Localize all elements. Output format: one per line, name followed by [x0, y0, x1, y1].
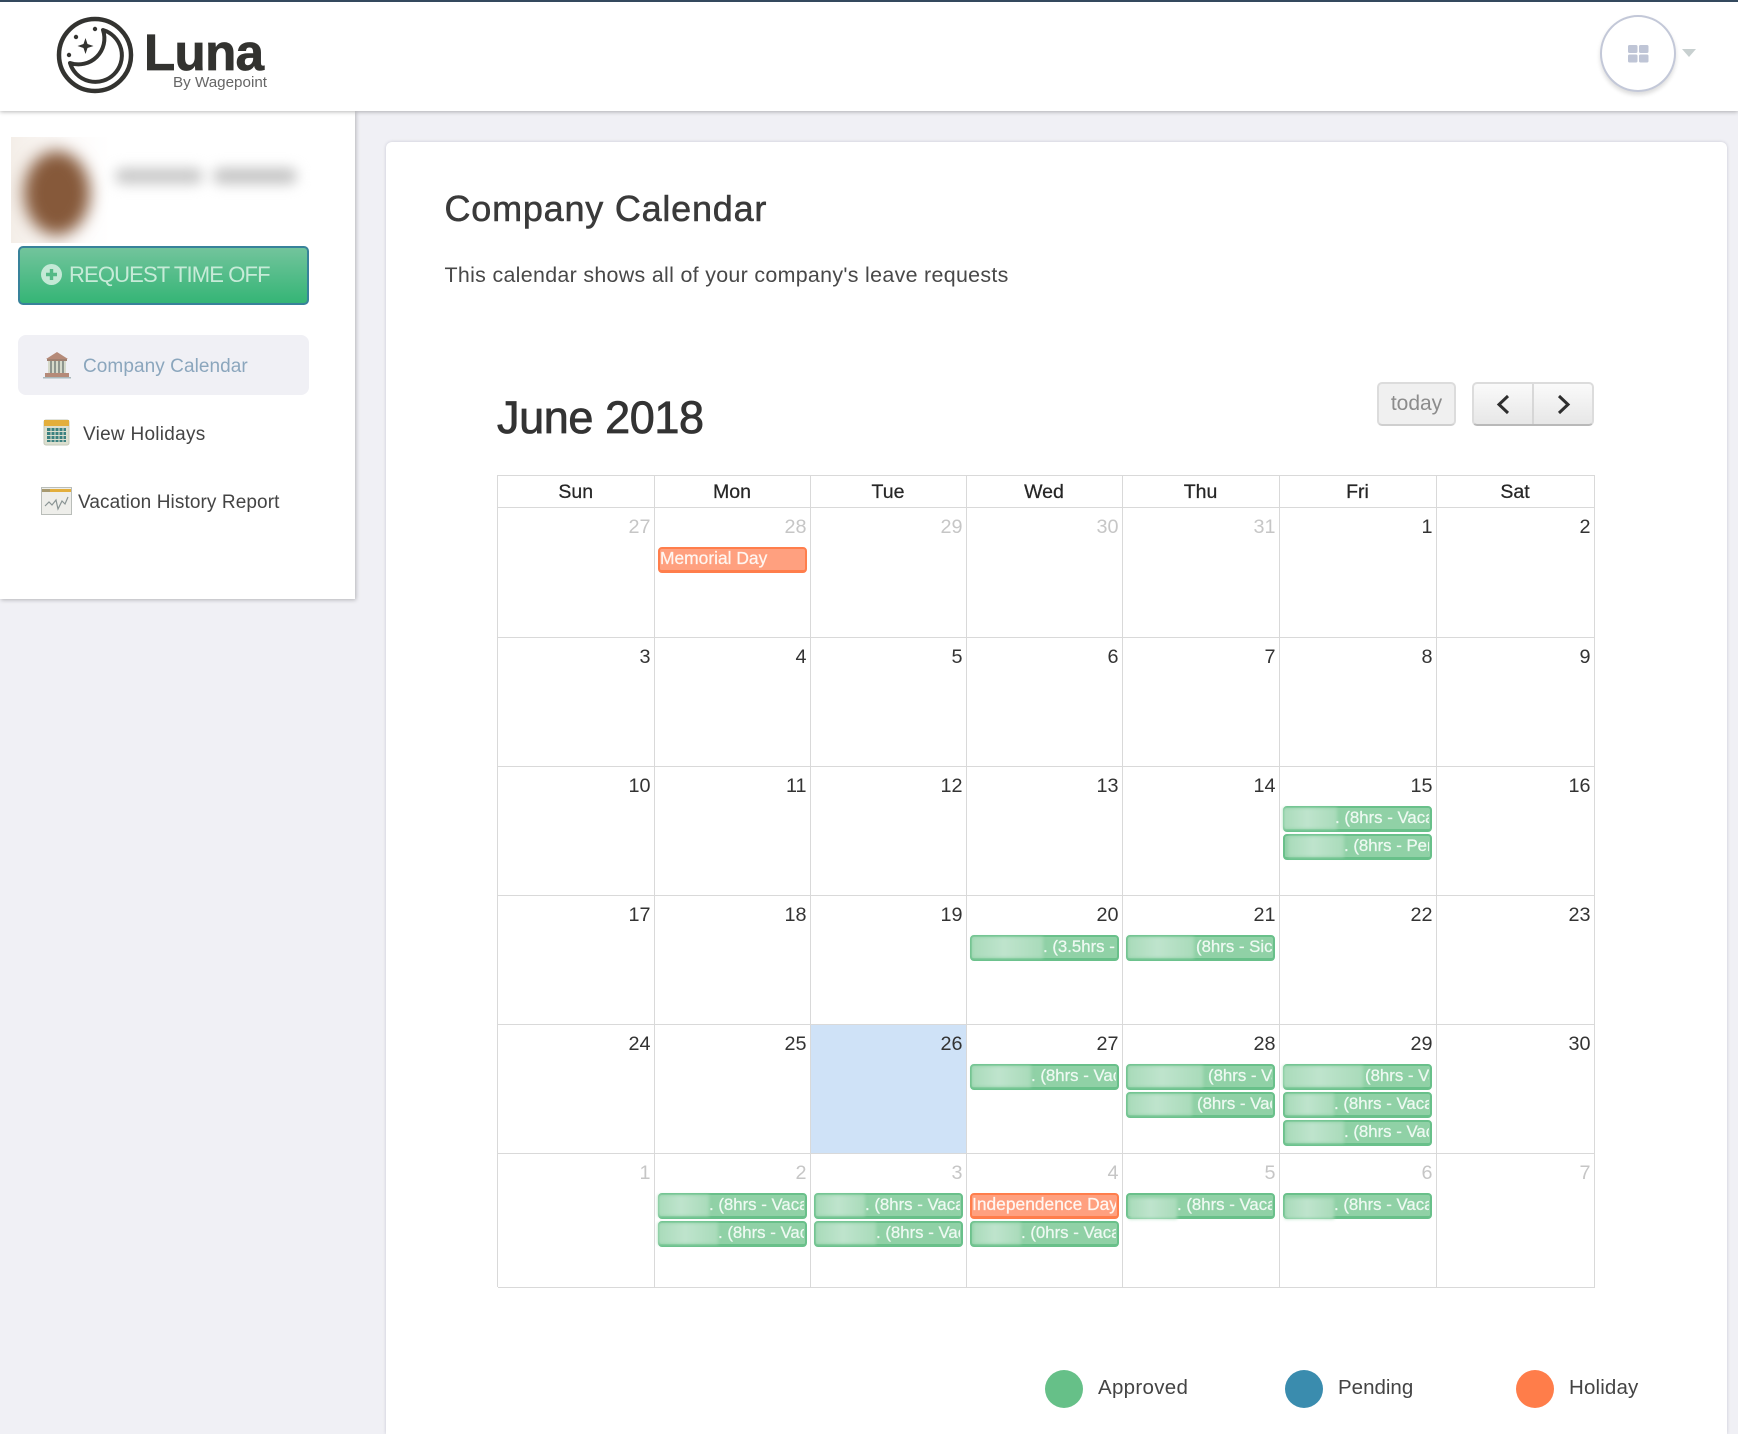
- calendar grid: 21: [1253, 904, 1276, 926]
- calendar grid: 13: [1096, 774, 1118, 796]
- blurred user name: [111, 161, 302, 191]
- event: July 3 first: [814, 1193, 963, 1219]
- event: July 5: [1126, 1193, 1275, 1219]
- event: June 15 personal: [1283, 834, 1432, 860]
- calendar grid: 12: [940, 774, 962, 796]
- calendar grid: Tue: [872, 481, 904, 503]
- calendar grid: 1: [639, 1162, 650, 1184]
- icon: report chart: [41, 487, 72, 515]
- calendar grid: Wed: [1024, 481, 1064, 503]
- calendar grid: 5: [951, 646, 962, 668]
- legend dot: pending: [1285, 1370, 1323, 1408]
- button label: REQUEST TIME OFF: [69, 262, 270, 287]
- calendar grid: 10: [628, 774, 650, 796]
- calendar grid: 24: [628, 1032, 650, 1054]
- calendar month heading: June 2018: [497, 392, 704, 443]
- icon: calendar: [44, 420, 70, 446]
- event: June 29 first: [1283, 1064, 1432, 1090]
- calendar grid: Mon: [713, 481, 751, 503]
- calendar grid: 2: [1579, 516, 1590, 538]
- top navigation bar: [0, 0, 1738, 111]
- event: June 27: [970, 1064, 1119, 1090]
- legend label: holiday: Holiday: [1569, 1376, 1638, 1399]
- calendar grid: [497, 475, 1594, 1287]
- logo wordmark: Luna: [144, 24, 263, 81]
- nav label: View Holidays: [83, 424, 206, 445]
- legend dot: approved: [1045, 1370, 1083, 1408]
- calendar grid: 19: [940, 904, 962, 926]
- event: July 2 first: [658, 1193, 806, 1219]
- legend label: pending: Pending: [1338, 1376, 1413, 1399]
- request time off button: [18, 246, 309, 305]
- event: June 28 first: [1126, 1064, 1275, 1090]
- event: June 29 second: [1283, 1092, 1432, 1118]
- icon: grid squares: [1628, 45, 1648, 62]
- today button: [1377, 382, 1456, 426]
- calendar grid: 29: [940, 516, 962, 538]
- calendar grid: 4: [1107, 1162, 1118, 1184]
- legend dot: holiday: [1516, 1370, 1554, 1408]
- calendar grid: 30: [1096, 516, 1118, 538]
- logo tagline: By Wagepoint: [173, 74, 267, 91]
- calendar grid: 15: [1410, 774, 1432, 796]
- event: June 15 vacation: [1283, 806, 1432, 832]
- calendar grid: 20: [1096, 904, 1118, 926]
- sidebar panel: [0, 111, 355, 599]
- event: June 29 third: [1283, 1120, 1432, 1146]
- calendar grid: 25: [784, 1032, 806, 1054]
- calendar grid: 5: [1264, 1162, 1276, 1184]
- event: July 3 second: [814, 1221, 963, 1247]
- calendar grid: 29: [1410, 1032, 1432, 1054]
- nav item: view holidays: [44, 420, 206, 446]
- calendar grid: 23: [1568, 904, 1590, 926]
- event: June 20: [970, 935, 1119, 961]
- nav item: company calendar: [18, 335, 309, 395]
- icon: Luna moon logo: [56, 16, 134, 94]
- calendar grid: 8: [1421, 646, 1432, 668]
- calendar grid: 27: [628, 516, 650, 538]
- app switcher button: [1600, 15, 1676, 92]
- calendar grid: 6: [1421, 1162, 1432, 1184]
- calendar grid: 28: [1253, 1032, 1276, 1054]
- calendar grid: 11: [786, 774, 806, 796]
- calendar grid: Fri: [1346, 481, 1369, 503]
- calendar grid: 27: [1096, 1032, 1118, 1054]
- event: July 2 second: [658, 1221, 806, 1247]
- event: July 6: [1283, 1193, 1432, 1219]
- calendar grid: 17: [628, 904, 650, 926]
- event: July 4 zero hours: [970, 1221, 1119, 1247]
- calendar grid: 26: [940, 1032, 962, 1054]
- calendar grid: 22: [1410, 904, 1432, 926]
- calendar grid: 18: [784, 904, 806, 926]
- page description: This calendar shows all of your company's leave requests: [444, 263, 1009, 287]
- previous and next buttons: [1472, 382, 1594, 426]
- calendar grid: 7: [1264, 646, 1276, 668]
- nav item: vacation history report: [41, 487, 280, 515]
- calendar grid: 14: [1253, 774, 1276, 796]
- nav label: Company Calendar: [83, 356, 248, 377]
- calendar grid: 30: [1568, 1032, 1590, 1054]
- calendar grid: 7: [1579, 1162, 1590, 1184]
- legend: [1045, 1370, 1638, 1408]
- calendar grid: Thu: [1184, 481, 1217, 503]
- main content card: [386, 142, 1727, 1434]
- icon: bank building: [43, 352, 71, 378]
- blurred user avatar: [11, 137, 111, 243]
- calendar grid: 3: [639, 646, 650, 668]
- today button: today: [1391, 392, 1442, 415]
- calendar grid: 16: [1568, 774, 1590, 796]
- calendar grid: 31: [1253, 516, 1276, 538]
- weekday headers: [498, 476, 654, 508]
- calendar grid: Sat: [1500, 481, 1530, 503]
- calendar grid: 28: [784, 516, 806, 538]
- event: Memorial Day: [658, 546, 806, 572]
- icon: plus circle: [41, 264, 62, 285]
- calendar grid: 9: [1579, 646, 1590, 668]
- legend label: approved: Approved: [1098, 1376, 1188, 1399]
- icon: dropdown caret: [1682, 49, 1696, 57]
- event: June 21 sick: [1126, 935, 1275, 961]
- calendar grid: 6: [1107, 646, 1118, 668]
- event: June 28 second: [1126, 1092, 1275, 1118]
- weekday headers: Sun: [558, 481, 593, 503]
- calendar grid: 3: [951, 1162, 962, 1184]
- calendar grid: 2: [795, 1162, 806, 1184]
- calendar grid: 1: [1421, 516, 1432, 538]
- nav label: Vacation History Report: [78, 492, 280, 513]
- page title: Company Calendar: [444, 188, 767, 229]
- divider and arrows: [1496, 384, 1570, 424]
- calendar grid: 4: [795, 646, 806, 668]
